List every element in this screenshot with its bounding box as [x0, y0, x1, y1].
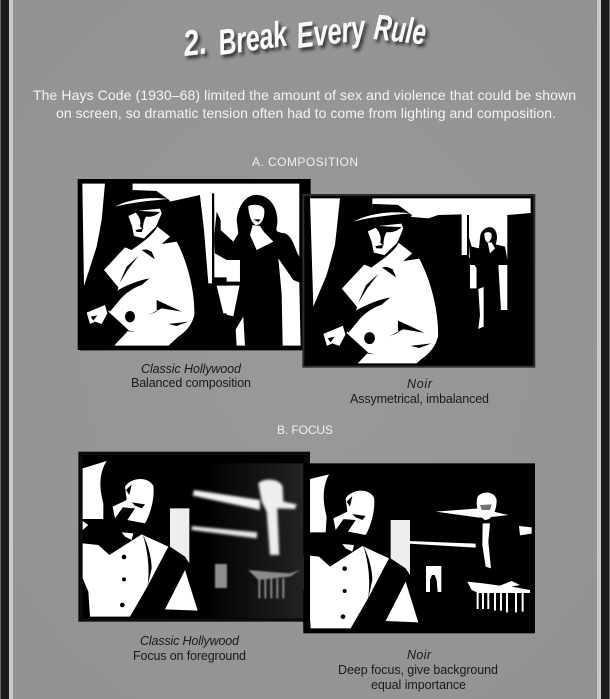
caption: classic focus: Focus on foreground	[133, 649, 246, 663]
figure: sharp background man	[408, 493, 532, 568]
intro text: on screen, so dramatic tension often had to come from lighting and composition.	[56, 105, 556, 121]
figure: foreground man	[83, 479, 198, 617]
figure: woman	[214, 195, 302, 346]
intro text: The Hays Code (1930–68) limited the amount of sex and violence that could be shown	[33, 87, 576, 103]
caption: noir composition: Assymetrical, imbalanced	[350, 392, 489, 406]
caption: classic composition: Classic Hollywood	[141, 362, 242, 376]
figure: man in trench coat	[323, 204, 438, 371]
title: Break	[215, 13, 291, 63]
caption: classic focus: Classic Hollywood	[140, 634, 240, 648]
caption: noir composition: Noir	[407, 377, 433, 391]
figure: man in trench coat	[87, 190, 194, 347]
figure: blurred background man	[192, 480, 300, 598]
figure: distant woman	[468, 227, 508, 332]
figure: foreground man	[303, 491, 418, 628]
heading: A. Composition: A. COMPOSITION	[252, 155, 358, 169]
heading: B. Focus: B. FOCUS	[277, 423, 333, 437]
title: Every	[294, 7, 369, 56]
icon: railing	[467, 581, 530, 612]
panel: noir composition	[303, 195, 534, 371]
caption: noir focus: equal importance	[371, 678, 466, 692]
title	[180, 6, 428, 64]
intro text	[33, 87, 576, 121]
caption: noir composition	[350, 377, 489, 406]
icon: doorway with silhouette	[426, 566, 441, 592]
caption: classic composition: Balanced composition	[131, 376, 251, 390]
caption: noir focus: Noir	[407, 648, 432, 662]
caption: classic focus	[133, 634, 246, 663]
title: Rule	[372, 6, 428, 52]
title: 2.	[180, 20, 209, 64]
caption: noir focus: Deep focus, give background	[338, 663, 498, 677]
caption: noir focus	[338, 648, 498, 692]
panel: classic Hollywood composition	[78, 179, 311, 350]
caption: classic composition	[131, 362, 251, 390]
panel: classic Hollywood focus	[78, 452, 310, 622]
panel: noir focus	[303, 463, 535, 633]
